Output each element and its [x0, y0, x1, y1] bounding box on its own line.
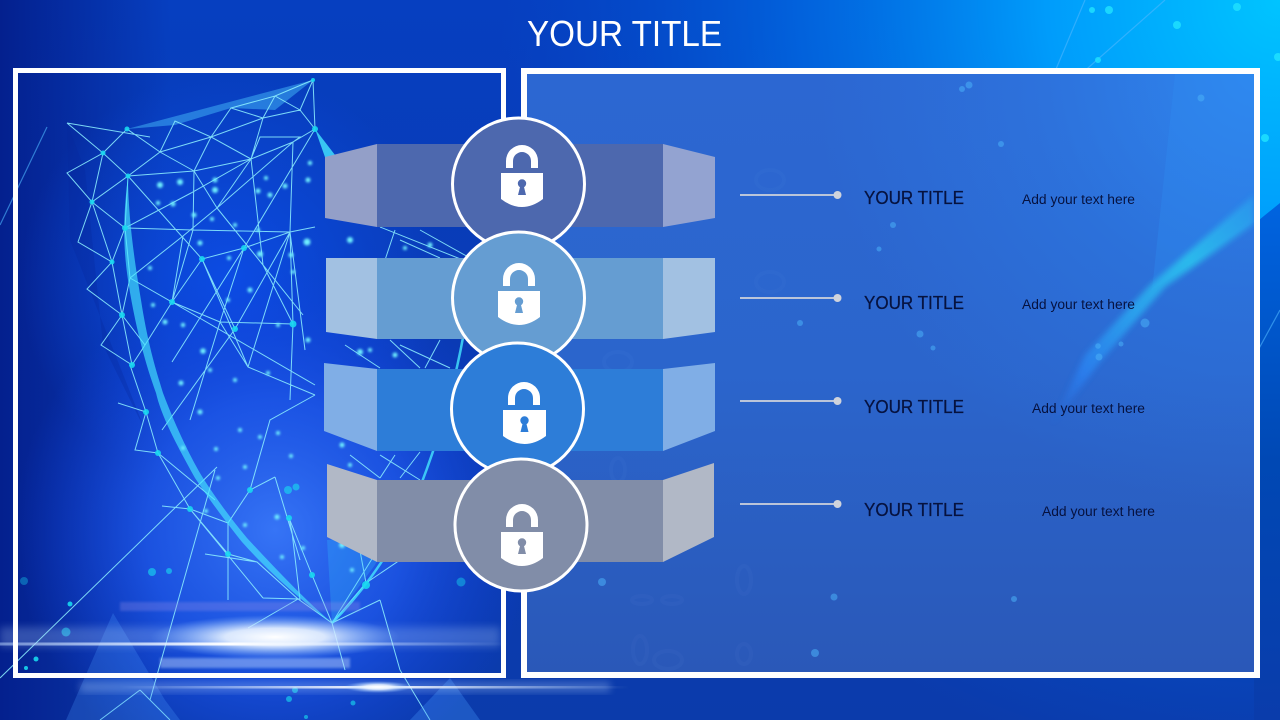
- circle 2 with lock icon: [452, 232, 584, 364]
- row 1: connector, title, text: YOUR TITLE: [864, 188, 964, 208]
- band 2: [326, 258, 715, 339]
- row 3: connector, title, text: YOUR TITLE: [864, 397, 964, 417]
- circle 1 with lock icon: [452, 118, 584, 250]
- row 1: connector, title, text: Add your text here: [1022, 192, 1135, 207]
- row 2: connector, title, text: Add your text here: [1022, 297, 1135, 312]
- panel: left white frame: [16, 70, 504, 676]
- row 3: connector, title, text: Add your text here: [1032, 401, 1145, 416]
- panel: right translucent frame: [524, 71, 1257, 675]
- row 3: connector, title, text: [740, 397, 1145, 417]
- row 4: connector, title, text: YOUR TITLE: [864, 500, 964, 520]
- circle 4 with lock icon: [455, 459, 587, 591]
- title: YOUR TITLE: [527, 13, 722, 54]
- row 2: connector, title, text: YOUR TITLE: [864, 293, 964, 313]
- circle 3 with lock icon: [452, 343, 584, 475]
- left image: network shield: [0, 78, 630, 720]
- band 4: [327, 463, 714, 562]
- row 4: connector, title, text: Add your text here: [1042, 504, 1155, 519]
- row 4: connector, title, text: [740, 500, 1155, 520]
- band 3: [324, 363, 715, 451]
- row 1: connector, title, text: [740, 188, 1135, 208]
- band 1: [325, 144, 715, 227]
- row 2: connector, title, text: [740, 293, 1135, 313]
